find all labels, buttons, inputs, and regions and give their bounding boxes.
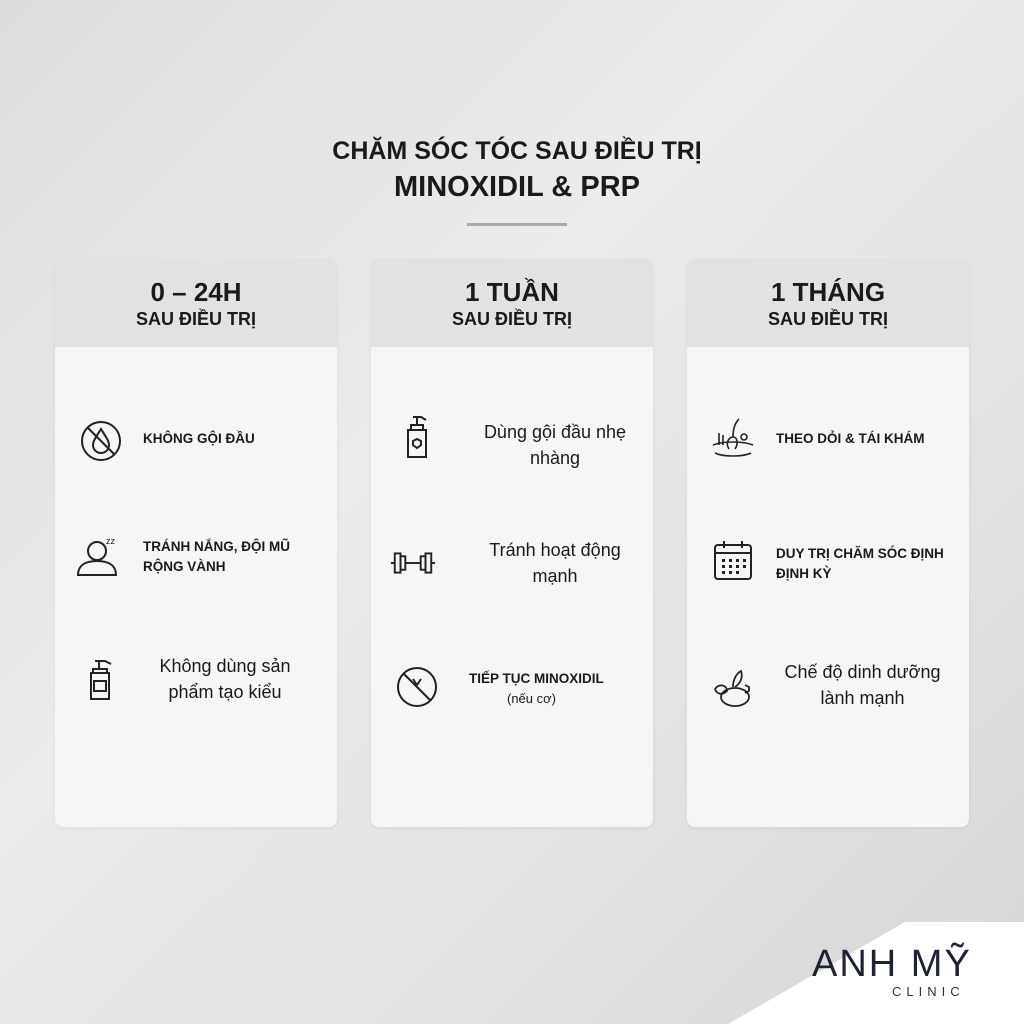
heading <box>371 259 653 347</box>
heading: 1 THÁNG <box>771 277 885 307</box>
heading: 0 – 24H <box>150 277 242 307</box>
panel: 1 month: ĐỊNH KỲ <box>776 566 832 581</box>
panel: 1 month: Chế độ dinh dưỡng lành mạnh <box>785 662 940 708</box>
item: avoid exercise <box>390 540 621 586</box>
panel: 1 week <box>371 259 653 827</box>
item: no styling products <box>90 656 291 702</box>
heading: SAU ĐIỀU TRỊ <box>768 309 888 329</box>
heading: SAU ĐIỀU TRỊ <box>452 309 572 329</box>
heading <box>687 259 969 347</box>
item: nutrition <box>714 662 940 708</box>
heading: 1 TUẦN <box>465 277 559 307</box>
panel: 0-24h: zz <box>106 536 116 546</box>
panel: 0-24h: KHÔNG GỘI ĐẦU <box>143 431 255 446</box>
item: gentle shampoo <box>407 416 626 468</box>
panel: 0-24h: Không dùng sản phẩm tạo kiểu <box>159 656 291 702</box>
title: CHĂM SÓC TÓC SAU ĐIỀU TRỊ <box>332 137 702 165</box>
panel: 1 month <box>687 259 969 827</box>
item: avoid sun <box>77 536 290 576</box>
panel: 0-24h <box>55 259 337 827</box>
logo: CLINIC <box>892 984 965 999</box>
panel: 1 week: (nếu cơ) <box>507 691 556 706</box>
item: calendar <box>714 541 944 581</box>
panel: 1 week: Dùng gội đầu nhẹ nhàng <box>484 422 626 468</box>
item: continue minoxidil <box>397 667 604 707</box>
logo: ANH MỸ <box>812 943 972 985</box>
panel: 0-24h: RỘNG VÀNH <box>143 559 226 574</box>
title: MINOXIDIL & PRP <box>394 171 640 203</box>
title <box>332 136 702 226</box>
heading <box>55 259 337 347</box>
item: no wash <box>81 421 255 461</box>
panel: 1 week: TIẾP TỤC MINOXIDIL <box>469 671 604 686</box>
panel: 1 month: THEO DỎI & TÁI KHÁM <box>776 431 924 446</box>
panel: 1 week: Tránh hoạt động mạnh <box>489 540 621 586</box>
item: follow up <box>712 418 924 457</box>
panel: 0-24h: TRÁNH NẮNG, ĐỘI MŨ <box>143 539 290 554</box>
heading: SAU ĐIỀU TRỊ <box>136 309 256 329</box>
panel: 1 month: DUY TRỊ CHĂM SÓC ĐỊNH <box>776 546 944 561</box>
